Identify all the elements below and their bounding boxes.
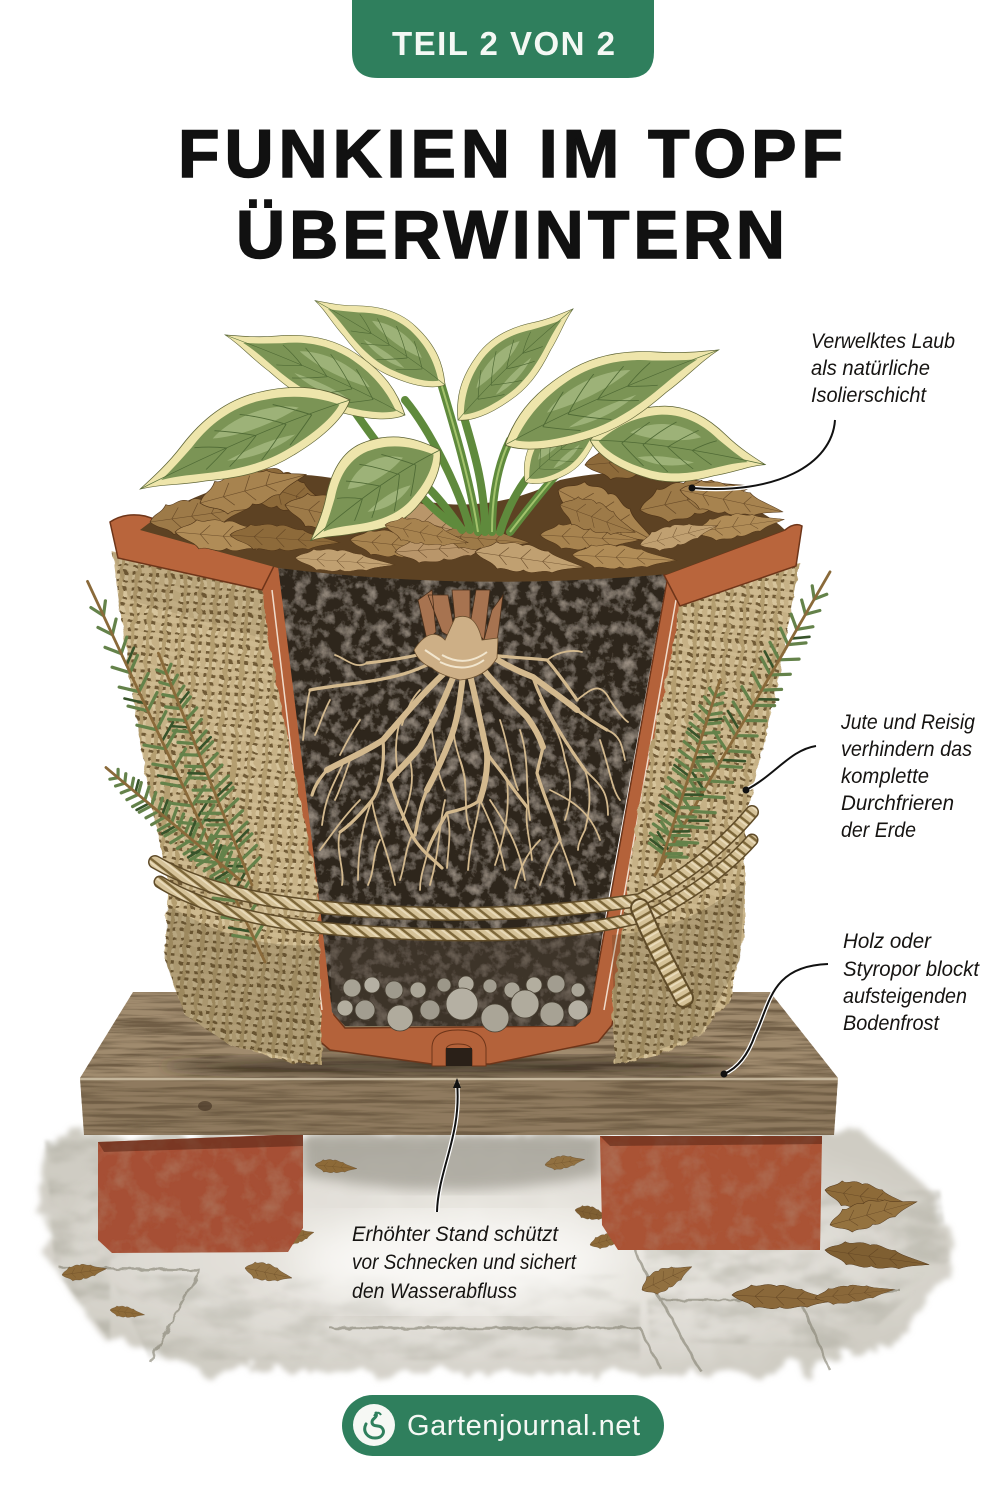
clay pebbles (337, 975, 588, 1032)
right brick (600, 1136, 822, 1250)
burlap wrap right (612, 562, 800, 1065)
callout: wood or styrofoam: Holz oder (843, 930, 932, 953)
callout: jute and brushwood: der Erde (841, 819, 916, 842)
mulch leaves over stems (383, 490, 641, 554)
rope (155, 812, 752, 998)
callout: insulating leaves (688, 330, 955, 492)
callout: raised position: Erhöhter Stand schützt (352, 1223, 559, 1246)
footer logo pill: Gartenjournal.net (407, 1410, 640, 1442)
fallen leaves on the ground (61, 1153, 931, 1320)
callout: jute and brushwood: komplette (841, 765, 929, 788)
leaf: small centre (506, 389, 624, 498)
callout: raised position: vor Schnecken und sichert (352, 1251, 577, 1274)
fir sprigs right (637, 561, 848, 886)
hosta plant (123, 272, 771, 570)
icon: plant in pot logo (353, 1404, 395, 1446)
terracotta pot walls (258, 562, 690, 1064)
left brick (98, 1134, 303, 1253)
mulch of dry leaves (140, 437, 786, 582)
callout: wood or styrofoam: Bodenfrost (843, 1012, 940, 1035)
callout: jute and brushwood: Durchfrieren (841, 792, 954, 815)
paved ground (40, 1130, 955, 1375)
burlap wrap left (112, 552, 322, 1065)
roots (303, 650, 628, 890)
callout: wood or styrofoam: aufsteigenden (843, 985, 967, 1008)
callout: raised position: den Wasserabfluss (352, 1280, 517, 1303)
callout: jute and brushwood: Jute und Reisig (840, 711, 975, 734)
callout: jute and brushwood: verhindern das (841, 738, 972, 761)
wooden board (80, 992, 838, 1135)
soil cross-section (278, 566, 668, 1026)
terracotta rim right (664, 525, 802, 606)
callout: insulating leaves: Isolierschicht (811, 384, 927, 407)
callout: jute and brushwood (742, 711, 975, 842)
header tab (352, 0, 654, 78)
callout: wood or styrofoam: Styropor blockt (843, 958, 980, 981)
burlap shading (112, 552, 745, 1065)
root crown (414, 590, 503, 680)
header tab: TEIL 2 VON 2 (392, 25, 615, 62)
fir sprigs left (69, 573, 283, 970)
leaf: upper left (214, 300, 420, 439)
leaf: top left (302, 272, 464, 405)
callout: wood or styrofoam (720, 930, 980, 1078)
title (178, 116, 843, 273)
leaf: front left (281, 408, 460, 570)
leaf: upper centre (434, 284, 589, 437)
title: FUNKIEN IM TOPF (178, 116, 843, 192)
callout: insulating leaves: als natürliche (811, 357, 930, 380)
terracotta rim left (110, 515, 278, 590)
callout: insulating leaves: Verwelktes Laub (811, 330, 955, 353)
drainage hole (432, 1030, 486, 1066)
leaf: lower left (123, 359, 362, 517)
callout: raised position (352, 1078, 577, 1303)
footer logo pill (342, 1395, 664, 1456)
leaf: large right (488, 311, 731, 472)
title: ÜBERWINTERN (236, 197, 785, 273)
pot with cutaway (69, 515, 848, 1066)
leaf: lower right (586, 396, 771, 495)
stems (350, 380, 595, 532)
